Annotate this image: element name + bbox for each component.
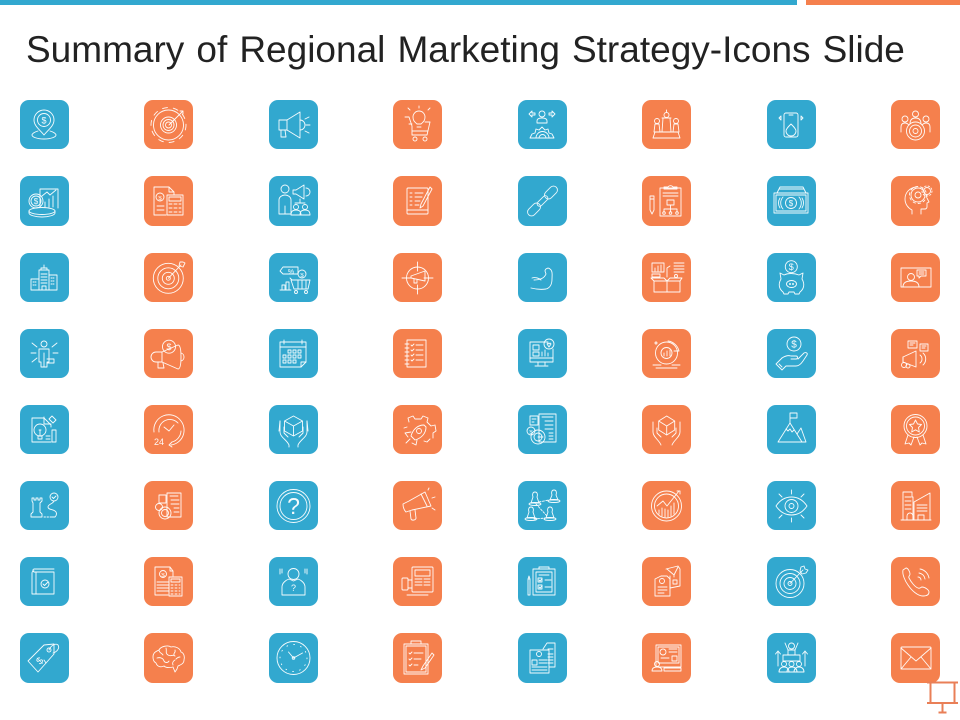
icon: megaphone sound <box>393 481 442 530</box>
icon: envelope <box>891 633 940 683</box>
icon: 24 hour clock: 24 <box>154 437 164 447</box>
icon: megaphone dollar: $ <box>166 342 172 352</box>
icon: radial pie chart <box>642 329 691 378</box>
icon: document with bulb <box>20 405 69 454</box>
icon: hand with coin <box>767 329 816 378</box>
icon: box with charts <box>642 253 691 302</box>
icon: chess pieces <box>642 100 691 149</box>
icon: telephone <box>891 557 940 606</box>
icon: document and calculator: $ <box>158 196 162 202</box>
icon: brochures <box>642 557 691 606</box>
icon: people network <box>518 481 567 530</box>
icon: circular growth chart <box>642 481 691 530</box>
icon: person question: ? <box>291 583 296 593</box>
icon: book with check <box>20 557 69 606</box>
icon: flexed arm <box>518 253 567 302</box>
icon: price tag <box>20 633 69 683</box>
icon: brain <box>144 633 193 683</box>
icon: location pin dollar: $ <box>41 116 47 126</box>
icon: head with gears <box>891 176 940 226</box>
icon: chart and coins: $ <box>34 197 39 206</box>
icon: discount tag cart: % <box>288 269 294 276</box>
icon: document and calculator <box>144 176 193 226</box>
icon: chain link <box>518 176 567 226</box>
icon: clipboard and pen <box>393 633 442 683</box>
icon: cash stack <box>767 176 816 226</box>
icon: clipboard checks pencil <box>518 557 567 606</box>
icon: 24 hour clock <box>144 405 193 454</box>
icon: bill and calculator: $ <box>161 573 165 579</box>
icon: cash stack: $ <box>789 199 794 208</box>
icon: checklist <box>393 329 442 378</box>
icon: person question <box>269 557 318 606</box>
icon: dartboard <box>767 557 816 606</box>
icon: tablet checklist pen <box>393 176 442 226</box>
icon: wall clock <box>269 633 318 683</box>
icon: piggy bank: $ <box>789 262 794 272</box>
icon: chess rook path <box>20 481 69 530</box>
icon: piggy bank <box>767 253 816 302</box>
icon: team gear <box>891 100 940 149</box>
icon: shopping cart idea <box>393 100 442 149</box>
icon: eye with rays <box>767 481 816 530</box>
icon: question mark: ? <box>287 493 300 519</box>
icon: megaphone <box>269 100 318 149</box>
icon: gear target <box>144 100 193 149</box>
icon: megaphone with messages <box>891 329 940 378</box>
icon: brochure leaflets <box>518 633 567 683</box>
icon: gear with rocket <box>393 405 442 454</box>
icon: mountain flag <box>767 405 816 454</box>
title: Summary of Regional Marketing Strategy-Icons Slide <box>26 29 905 70</box>
icon: speaker and audience <box>269 176 318 226</box>
icon: question mark <box>269 481 318 530</box>
icon: video call frame <box>891 253 940 302</box>
icon: discount tag cart <box>269 253 318 302</box>
icon: calendar <box>269 329 318 378</box>
top bar: blue <box>0 0 797 5</box>
icon: document target <box>518 405 567 454</box>
icon: document target: $ <box>529 430 533 436</box>
icon: chart and coins <box>20 176 69 226</box>
icon: office buildings <box>891 481 940 530</box>
icon: discount tag cart: $ <box>300 273 304 279</box>
icon: city buildings <box>20 253 69 302</box>
icon: audience growth <box>767 633 816 683</box>
icon: bill and calculator <box>144 557 193 606</box>
icon: target and arrow <box>144 253 193 302</box>
icon: hand with coin: $ <box>791 340 797 350</box>
top bar: orange <box>806 0 960 5</box>
icon: person with rays <box>20 329 69 378</box>
icon: clipboard org chart <box>642 176 691 226</box>
icon: computer with person <box>642 633 691 683</box>
icon: star badge <box>891 405 940 454</box>
icon: person gear arrows <box>518 100 567 149</box>
icon: hands with box <box>269 405 318 454</box>
icon: report target <box>144 481 193 530</box>
icon grid <box>20 100 940 683</box>
icon: price tag: $ <box>34 655 47 667</box>
icon: megaphone dollar <box>144 329 193 378</box>
icon: hands with package <box>642 405 691 454</box>
icon: location pin dollar <box>20 100 69 149</box>
icon: crosshair megaphone <box>393 253 442 302</box>
icon: phone with drop <box>767 100 816 149</box>
icon: presentation board <box>927 682 958 712</box>
icon: monitor dashboard <box>518 329 567 378</box>
icon: newspaper <box>393 557 442 606</box>
